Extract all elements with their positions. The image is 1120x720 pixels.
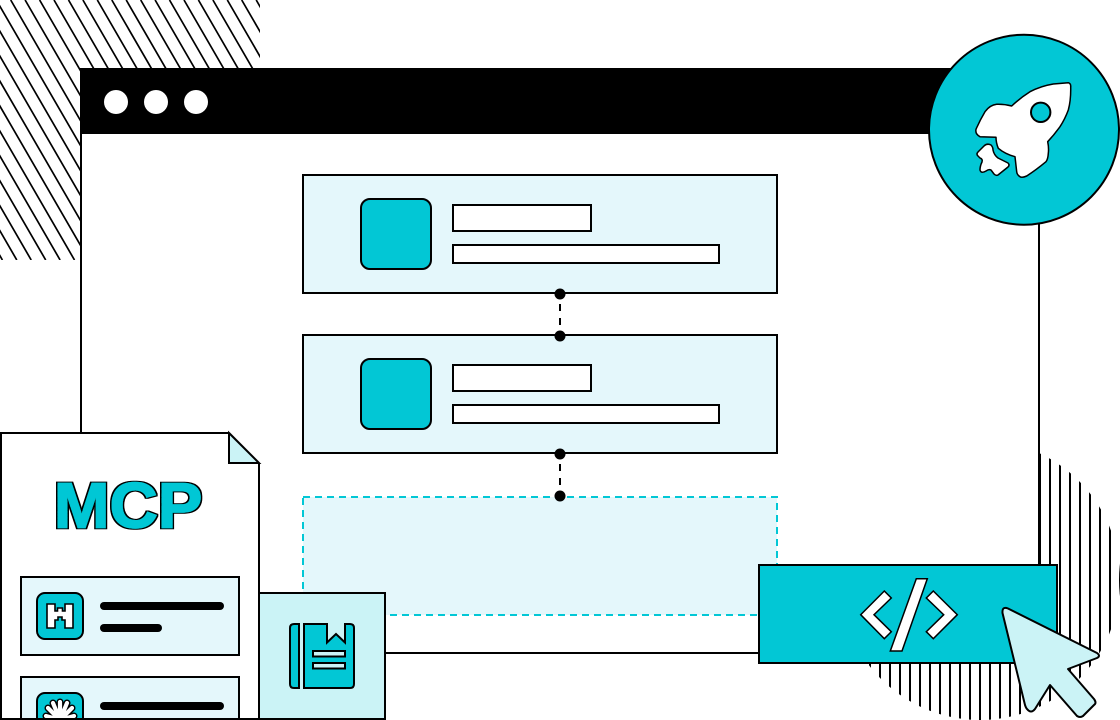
icon: code brackets: [861, 579, 957, 651]
document bottom edge: [0, 718, 260, 720]
connector between card 1 and card 2: [554, 288, 566, 342]
title bar: [80, 68, 980, 134]
workflow card 1: [303, 175, 777, 293]
code panel: [759, 565, 1057, 663]
window control dots: [104, 90, 208, 114]
MCP heading: MCP: [54, 470, 202, 541]
rocket badge: [929, 35, 1119, 225]
window body: [81, 100, 1039, 653]
connector between card 2 and placeholder: [554, 448, 566, 502]
dashed placeholder card: [303, 497, 777, 615]
browser window: [80, 68, 1039, 653]
MCP document: [0, 433, 260, 720]
document list item 2: [21, 677, 239, 720]
icon: book: [290, 624, 354, 688]
vertical striped circle: [870, 440, 1120, 720]
workflow card 2: [303, 335, 777, 453]
book panel: [259, 593, 385, 719]
diagonal hatch pattern: [0, 0, 260, 260]
document list item 1: [21, 577, 239, 655]
folded corner: [229, 433, 259, 463]
icon: rocket: [976, 83, 1071, 177]
icon: cursor arrow: [1002, 608, 1099, 717]
document sheet: [1, 433, 259, 719]
